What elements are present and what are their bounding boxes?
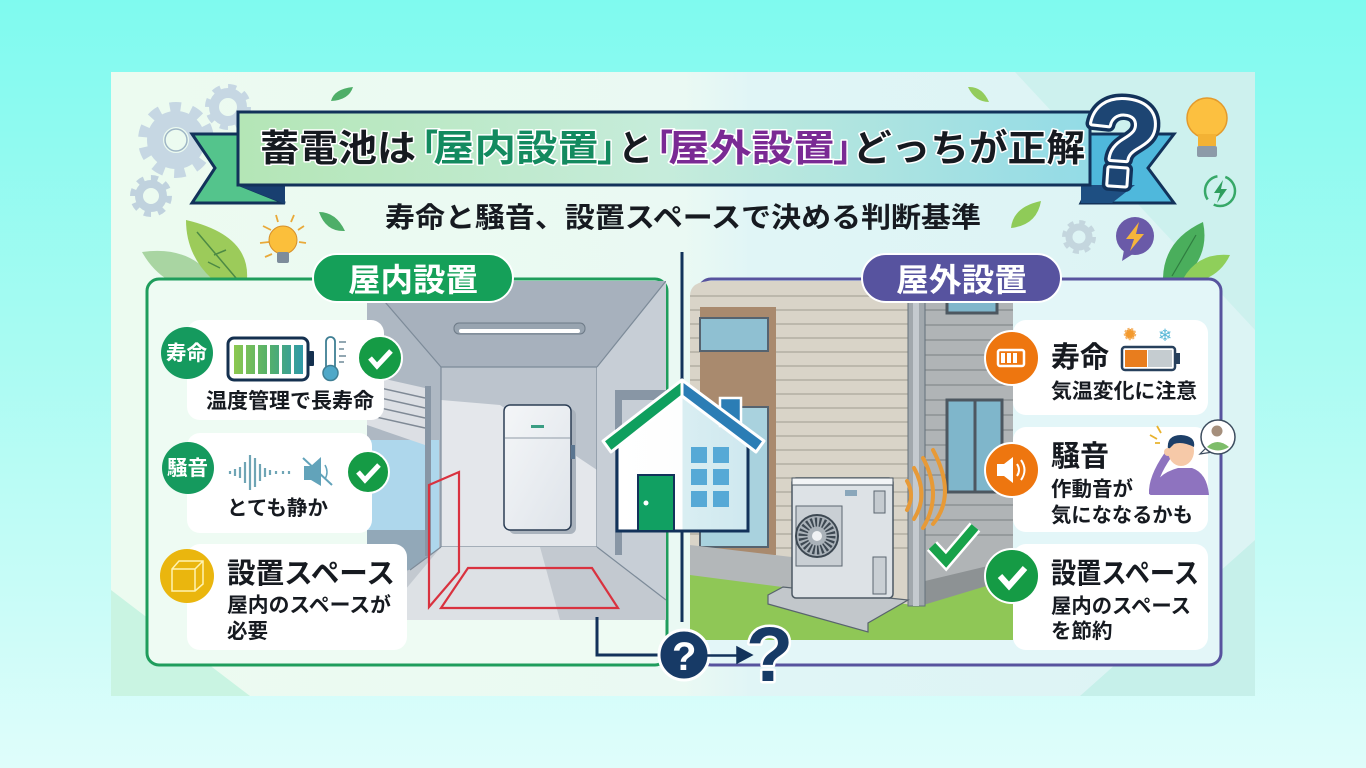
title ribbon (192, 112, 1174, 204)
indoor header pill (313, 254, 513, 302)
card: lifespan indoor (161, 320, 402, 420)
question circle: ? (672, 635, 696, 679)
icon: snowflake: ❄ (1158, 326, 1172, 346)
icon: neighbour bubble (1200, 420, 1235, 454)
icon: light bulb left (260, 215, 306, 263)
card: space indoor: 屋内のスペースが (227, 593, 392, 617)
space badge (160, 549, 214, 603)
center divider line (680, 252, 684, 622)
icon: partly charged battery (1122, 347, 1180, 370)
outdoor panel frame (699, 279, 1221, 665)
noise badge: 騒音 (167, 457, 208, 480)
title text: 蓄電池は (260, 128, 416, 169)
title text: 」 (597, 128, 634, 169)
ribbon fold right (1081, 185, 1135, 203)
icon: big question mark: ? (1080, 73, 1164, 214)
title text (260, 128, 1085, 169)
card: lifespan indoor: 温度管理で長寿命 (206, 390, 374, 413)
lifespan badge (161, 327, 213, 379)
ribbon banner (238, 112, 1090, 185)
green check mark (932, 527, 975, 561)
card: lifespan outdoor: 寿命 (1051, 341, 1109, 374)
big question mark: ? (746, 612, 793, 698)
outdoor house scene (690, 281, 1013, 640)
card: lifespan outdoor: 気温変化に注意 (1051, 380, 1197, 403)
speaker badge (985, 443, 1039, 497)
card: noise outdoor: 騒音 (1051, 440, 1109, 473)
icon: sound wave (230, 455, 289, 490)
card: space outdoor: 設置スペース (1051, 558, 1199, 590)
icon: muted speaker (303, 457, 332, 486)
icon: big question mark: ? (1080, 73, 1164, 214)
card: noise outdoor: 作動音が (1051, 477, 1133, 501)
card: space indoor: 必要 (227, 620, 268, 643)
green check mark inner (932, 527, 975, 561)
card: space indoor: 設置スペース (227, 558, 395, 590)
decoration: gears left (133, 87, 248, 214)
ribbon tail left (192, 134, 285, 203)
question circle (659, 630, 709, 680)
card: noise outdoor (985, 420, 1235, 532)
title text: 」 (833, 128, 870, 169)
outdoor header pill: 屋外設置 (896, 262, 1027, 298)
card: noise indoor (162, 433, 389, 533)
decoration: leaves left (142, 87, 1041, 280)
ribbon fold left (237, 185, 285, 204)
title text: と (618, 128, 653, 169)
panel: outdoor (690, 254, 1235, 665)
infographic background (111, 72, 1255, 696)
icon: check (358, 336, 402, 380)
icon: full battery (228, 338, 314, 380)
ribbon tail right (1081, 134, 1174, 203)
flow connector with question marks (597, 612, 793, 698)
connector line (597, 617, 665, 655)
icon: energy cycle (1205, 176, 1235, 206)
orange battery badge (985, 331, 1039, 385)
house chimney (720, 398, 741, 426)
red installation space outline (429, 472, 618, 608)
icon: light bulb right (1187, 98, 1227, 157)
icon: thermometer (323, 337, 346, 380)
noise badge (162, 442, 214, 494)
card: space outdoor: を節約 (1051, 620, 1112, 643)
decoration: leaves right (1163, 222, 1230, 279)
indoor panel frame (147, 279, 667, 665)
decoration: right icons (1064, 98, 1235, 279)
panel: indoor (147, 254, 667, 665)
card: space outdoor (985, 544, 1208, 650)
house roof (603, 380, 764, 452)
arrow (708, 647, 752, 663)
card: noise indoor: とても静か (227, 497, 328, 520)
icon: annoyed person (1150, 426, 1209, 495)
house door (638, 475, 674, 531)
check badge (985, 549, 1039, 603)
title text: 「 (403, 128, 440, 169)
icon: gear right (1064, 222, 1094, 252)
lifespan badge: 寿命 (166, 342, 207, 365)
title text: 屋外設置 (668, 128, 835, 169)
house window (691, 447, 729, 507)
title text: 「 (638, 128, 675, 169)
title text: どっちが正解 (853, 128, 1085, 169)
card: space outdoor: 屋内のスペース (1051, 595, 1191, 618)
icon: central house (603, 380, 764, 531)
indoor battery unit (504, 405, 576, 534)
icon: sun (1125, 329, 1135, 339)
indoor header pill: 屋内設置 (348, 262, 478, 298)
icon: lightning speech bubble (1116, 217, 1154, 261)
outdoor header pill (862, 254, 1061, 302)
title text: 屋内設置 (433, 128, 599, 169)
card: lifespan outdoor (985, 320, 1208, 415)
icon: check (347, 451, 389, 493)
outdoor air-conditioner unit (768, 478, 908, 632)
subtitle: 寿命と騒音、設置スペースで決める判断基準 (385, 202, 981, 233)
card: noise outdoor: 気にななるかも (1051, 504, 1193, 527)
indoor room illustration (367, 281, 666, 620)
sound waves (907, 450, 945, 528)
card: space indoor (160, 544, 407, 650)
